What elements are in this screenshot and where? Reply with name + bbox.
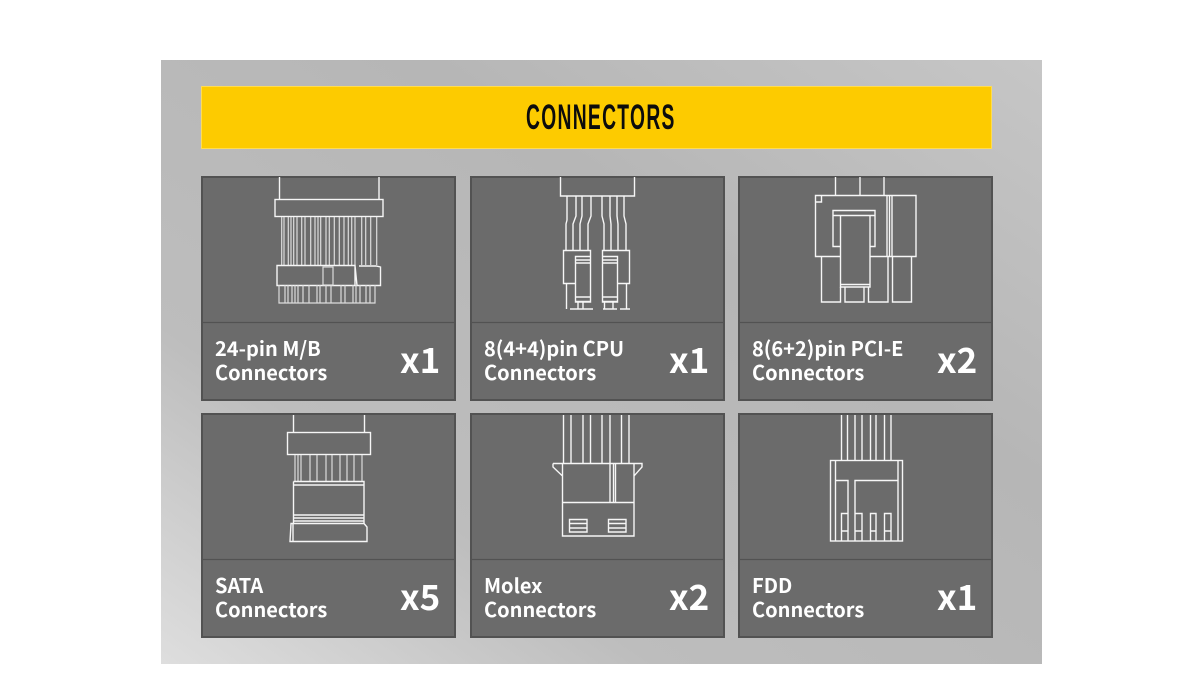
label: 24-pin M/B: Connectors: [215, 357, 327, 386]
panel: 24-pin M/B connectors: [202, 177, 455, 400]
label: FDD: FDD: [752, 570, 792, 599]
count: x2: x2: [669, 570, 709, 621]
count: x1: x1: [669, 333, 709, 384]
icon: Molex connector: [553, 415, 642, 536]
icon: CPU connector: [560, 177, 634, 309]
panel: 8(6+2)pin PCI-E connectors: [739, 177, 992, 400]
label: SATA: SATA: [215, 570, 263, 599]
background panel: [161, 60, 1042, 664]
label: Molex: Molex: [484, 570, 542, 599]
title banner: [202, 86, 992, 148]
count: x2: x2: [937, 333, 977, 384]
label: 24-pin M/B: 24-pin M/B: [215, 333, 321, 362]
count: x1: x1: [937, 570, 977, 621]
label: Molex: Connectors: [484, 594, 596, 623]
icon: FDD connector: [830, 415, 902, 541]
label: SATA: Connectors: [215, 594, 327, 623]
label: 8(6+2)pin PCI-E: 8(6+2)pin PCI-E: [752, 333, 903, 362]
icon: PCI-E connector: [816, 177, 916, 302]
panel: SATA connectors: [202, 414, 455, 637]
count: x5: x5: [400, 570, 440, 621]
label: 8(4+4)pin CPU: Connectors: [484, 357, 596, 386]
icon: SATA connector: [288, 415, 370, 542]
panel: Molex connectors: [471, 414, 724, 637]
panel: FDD connectors: [739, 414, 992, 637]
label: FDD: Connectors: [752, 594, 864, 623]
label: 8(4+4)pin CPU: 8(4+4)pin CPU: [484, 333, 624, 362]
count: x1: x1: [400, 333, 440, 384]
label: 8(6+2)pin PCI-E: Connectors: [752, 357, 864, 386]
title banner: CONNECTORS: [526, 97, 676, 136]
icon: 24-pin connector: [275, 177, 383, 303]
panel: 8(4+4)pin CPU connectors: [471, 177, 724, 400]
